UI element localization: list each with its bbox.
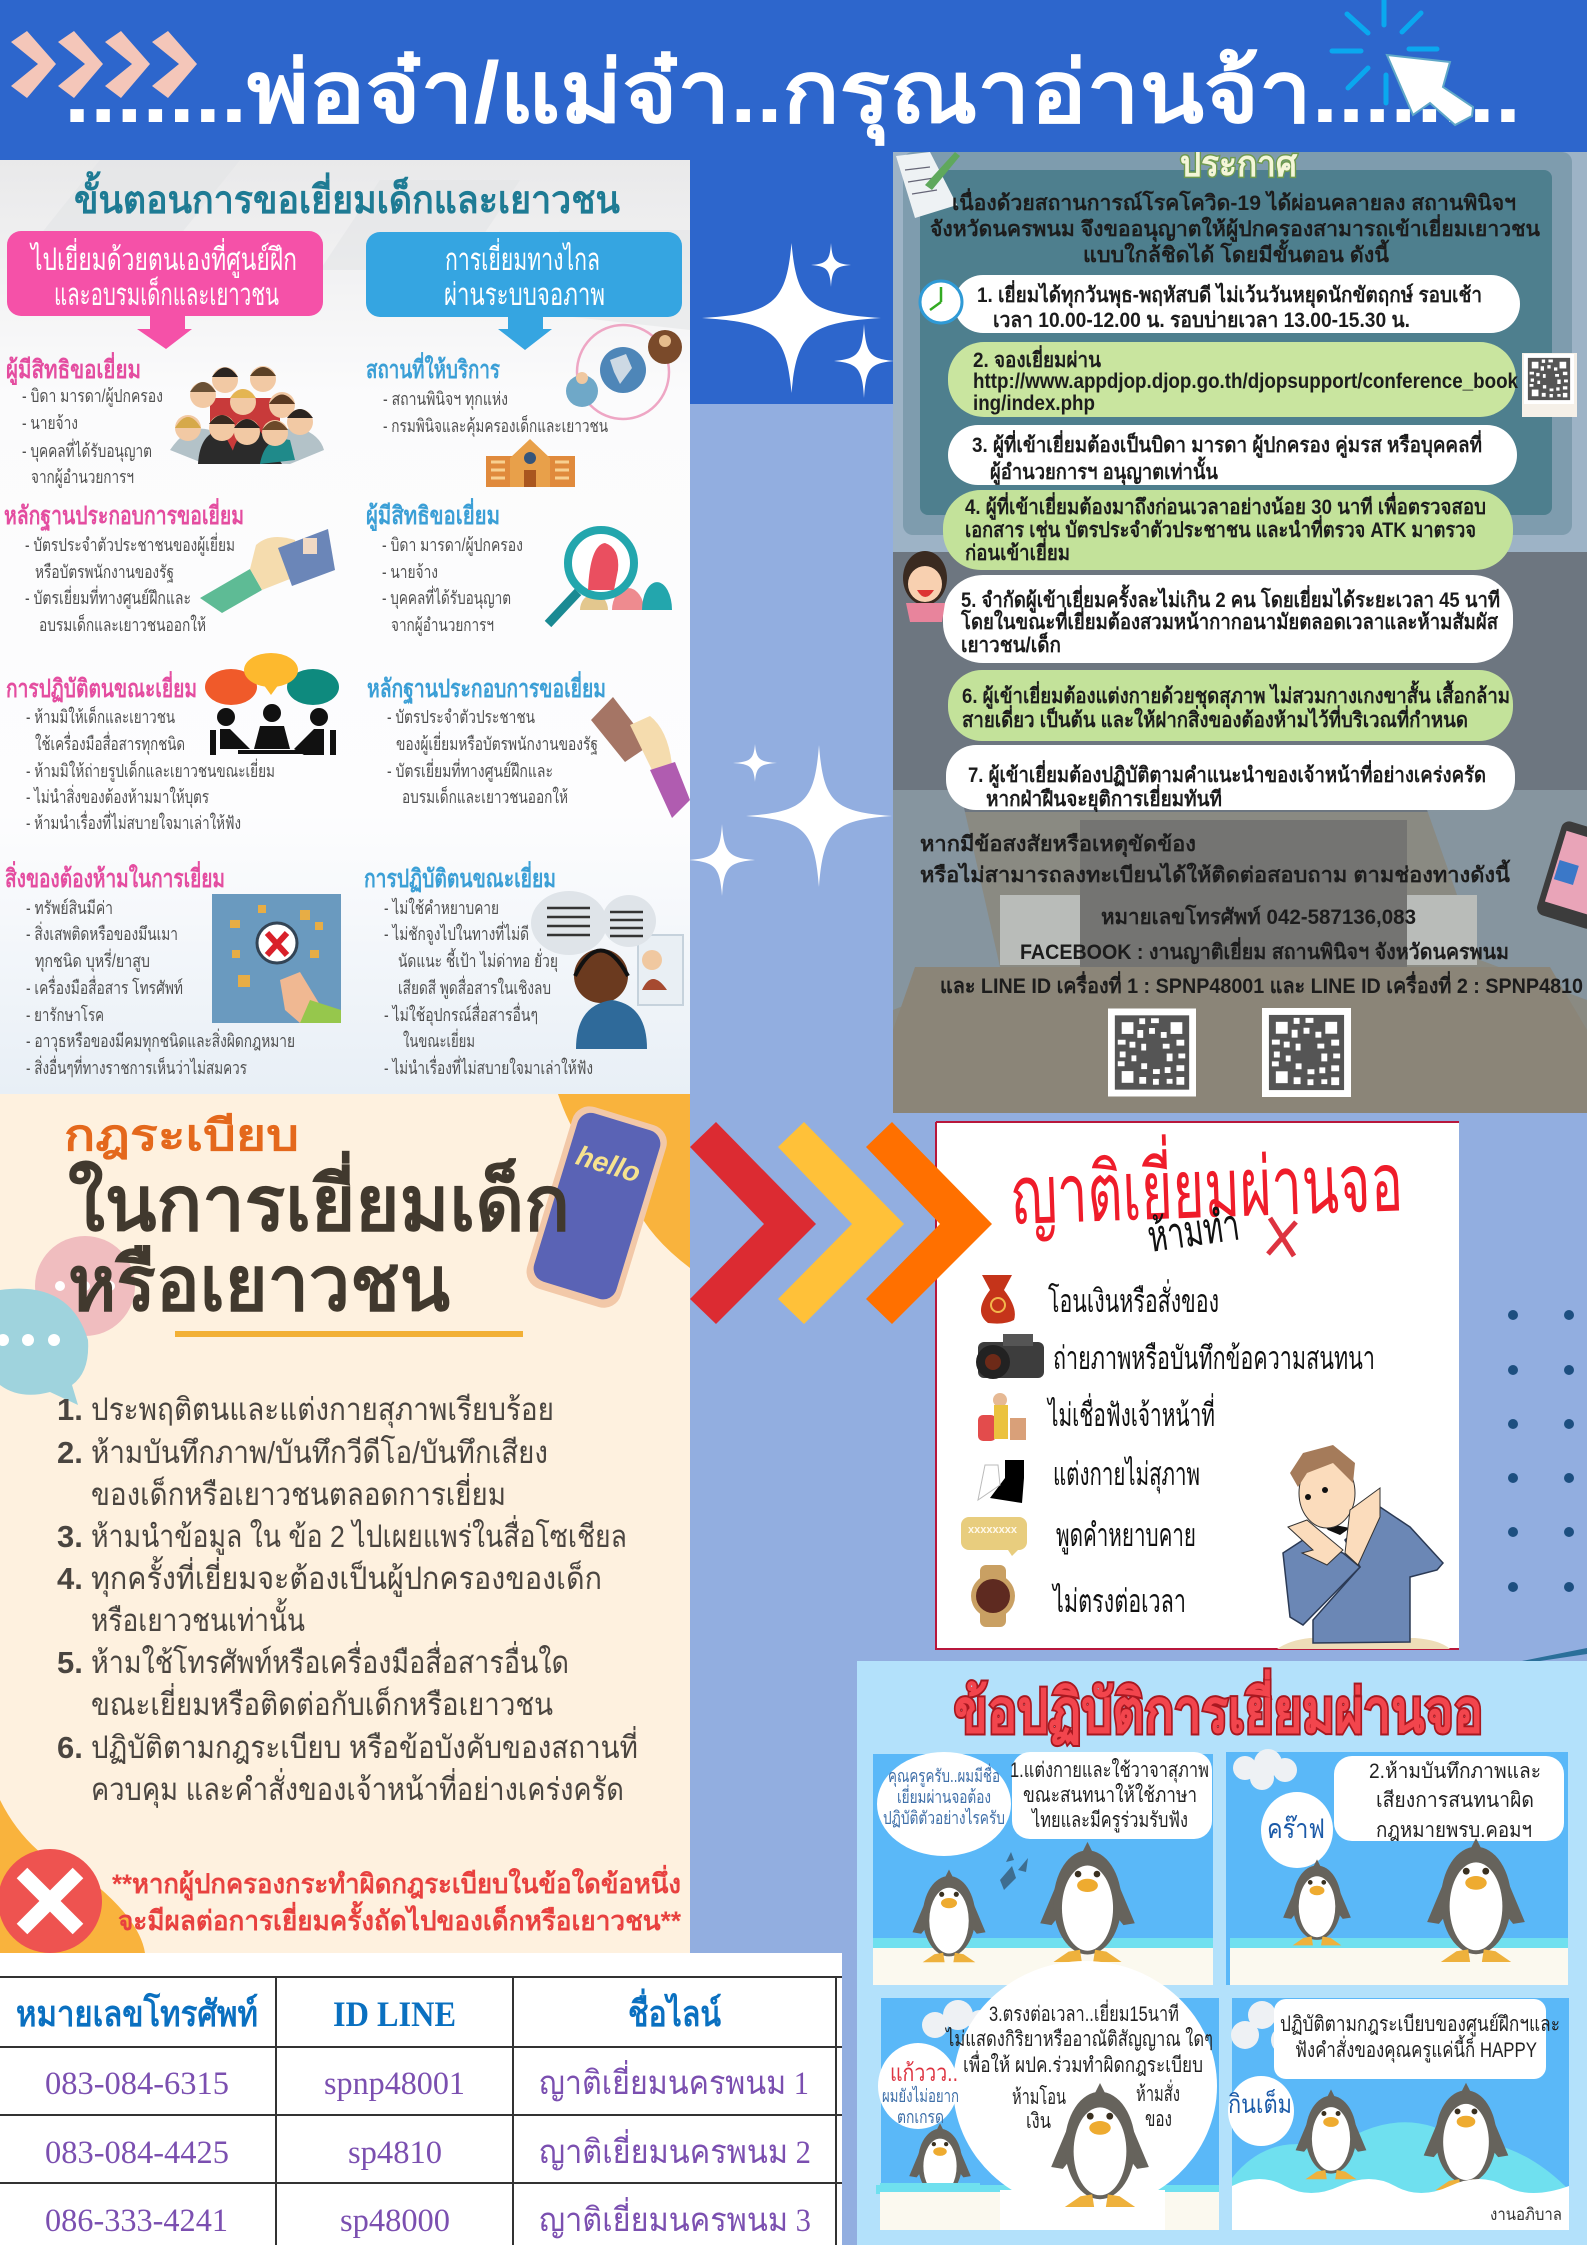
comic frame 3: [876, 1961, 1219, 2230]
block: documents in person: [4, 498, 244, 635]
step 6: [948, 670, 1513, 741]
block: conduct in person: ใช้เครื่องมือสื่อสารทุกชนิด: [35, 731, 185, 755]
block: eligible in person: [6, 352, 163, 488]
box: in person: ไปเยี่ยมด้วยตนเองที่ศูนย์ฝึก: [29, 238, 297, 278]
box: remote: การเยี่ยมทางไกล: [445, 238, 600, 277]
block: documents remote: ของผู้เยี่ยมหรือบัตรพนักงานของรัฐ: [396, 731, 598, 755]
speech bubble: pink: [35, 1236, 135, 1336]
table header: ชื่อไลน์: [628, 1988, 721, 2034]
title: .......พ่อจ๋า/แม่จ๋า..กรุณาอ่านจ้า........: [64, 45, 1521, 146]
row 3: [45, 2197, 811, 2239]
icon: meeting with speech bubbles: [205, 653, 339, 755]
block: conduct in person: - ห้ามนำเรื่องที่ไม่สบายใจมาเล่าให้ฟัง: [26, 810, 241, 833]
warning text: **หากผู้ปกครองกระทำผิดกฎระเบียบในข้อใดข้อหนึ่ง: [112, 1864, 681, 1901]
text: not on time: ไม่ตรงต่อเวลา: [1051, 1583, 1186, 1619]
panel: comic: [857, 1661, 1587, 2245]
icon: speech bubble rude: [961, 1517, 1027, 1556]
step 5: โดยในขณะที่เยี่ยมต้องสวมหน้ากากอนามัยตลอดเวลาและห้ามสัมผัส: [960, 606, 1498, 634]
row 1: [45, 2060, 809, 2102]
step 7: 7. ผู้เข้าเยี่ยมต้องปฏิบัติตามคำแนะนำของเจ้าหน้าที่อย่างเคร่งครัด: [968, 759, 1486, 789]
block: eligible in person: - บิดา มารดา/ผู้ปกครอง: [22, 386, 163, 407]
list: rules: ปฏิบัติตามกฎระเบียบ หรือข้อบังคับของสถานที่: [91, 1726, 638, 1765]
block: prohibited items: - อาวุธหรือของมีคมทุกชนิดและสิ่งผิดกฎหมาย: [26, 1028, 295, 1052]
block: prohibited items: ทุกชนิด บุหรี่/ยาสูบ: [35, 948, 150, 972]
icon: red x: [0, 1849, 102, 1953]
list: rules: 6.: [57, 1730, 83, 1765]
comic frame 2: 2.ห้ามบันทึกภาพและ: [1369, 1760, 1541, 1783]
icon: wrist watch: [971, 1565, 1015, 1627]
step 1: 1. เยี่ยมได้ทุกวันพุธ-พฤหัสบดี ไม่เว้นวันหยุดนักขัตฤกษ์ รอบเช้า: [977, 279, 1482, 309]
step 6: 6. ผู้เข้าเยี่ยมต้องแต่งกายด้วยชุดสุภาพ ไม่สวมกางเกงขาสั้น เสื้อกล้าม: [962, 680, 1510, 710]
block: conduct remote: ในขณะเยี่ยม: [403, 1028, 475, 1051]
sparkles: [689, 243, 894, 896]
step 4: เอกสาร เช่น บัตรประจำตัวประชาชน และนำที่ตรวจ ATK มาตรวจ: [965, 514, 1476, 542]
block: service places: - สถานพินิจฯ ทุกแห่ง: [383, 389, 508, 410]
box: remote: [366, 232, 682, 350]
list: rules: ห้ามบันทึกภาพ/บันทึกวีดีโอ/บันทึกเสียง: [91, 1435, 548, 1470]
icon: cursor with rays: [1332, 0, 1473, 125]
comic frame 1: ไทยและมีครูร่วมรับฟัง: [1030, 1808, 1188, 1833]
block: conduct in person: - ไม่นำสิ่งของต้องห้ามมาให้บุตร: [26, 784, 209, 808]
step 4: [943, 490, 1513, 570]
block: eligible remote: [366, 498, 523, 636]
header band: [0, 0, 1587, 160]
block: eligible remote: - นายจ้าง: [382, 562, 438, 582]
icon: woman: [903, 551, 947, 622]
block: prohibited items: - สิ่งเสพติดหรือของมึนเมา: [26, 921, 178, 944]
heading: do not: ห้ามทำ: [1145, 1201, 1242, 1262]
row 3: sp48000: [340, 2203, 450, 2239]
block: documents in person: หลักฐานประกอบการขอเยี่ยม: [4, 498, 244, 532]
text: improper dress: แต่งกายไม่สุภาพ: [1053, 1456, 1200, 1494]
icon: phone hello: hello: [573, 1140, 644, 1188]
step 3: [948, 425, 1517, 486]
comic frame 1: เยี่ยมผ่านจอต้อง: [897, 1784, 991, 1807]
icon: clock: [920, 281, 962, 323]
step 2: 2. จองเยี่ยมผ่าน: [973, 344, 1102, 372]
icon: money bag: [981, 1275, 1015, 1324]
list: rules: ห้ามนำข้อมูล ใน ข้อ 2 ไปเผยแพร่ในสื่อโซเชียล: [91, 1515, 627, 1555]
step 2: http://www.appdjop.djop.go.th/djopsupport/conference_book: [973, 370, 1518, 393]
underline: [175, 1331, 523, 1337]
step 4: 4. ผู้ที่เข้าเยี่ยมต้องมาถึงก่อนเวลาอย่างน้อย 30 นาที เพื่อตรวจสอบ: [965, 491, 1486, 521]
block: eligible in person: - บุคคลที่ได้รับอนุญาต: [22, 438, 152, 462]
icon: inspection with red x: [212, 894, 341, 1023]
block: prohibited items: สิ่งของต้องห้ามในการเยี่ยม: [5, 861, 225, 893]
block: conduct remote: - ไม่ใช้คำหยาบคาย: [384, 897, 499, 918]
block: prohibited items: - สิ่งอื่นๆที่ทางราชการเห็นว่าไม่สมควร: [26, 1055, 247, 1078]
step 5: 5. จำกัดผู้เข้าเยี่ยมครั้งละไม่เกิน 2 คน โดยเยี่ยมได้ระยะเวลา 45 นาที: [961, 584, 1500, 614]
row 2: sp4810: [348, 2135, 442, 2171]
row 3: 086-333-4241: [45, 2203, 228, 2239]
block: documents in person: อบรมเด็กและเยาวชนออกให้: [39, 613, 206, 635]
list: rules: ประพฤติตนและแต่งกายสุภาพเรียบร้อย: [91, 1392, 554, 1429]
list: rules: ทุกครั้งที่เยี่ยมจะต้องเป็นผู้ปกครองของเด็ก: [91, 1556, 602, 1598]
speech bubble: teal: [0, 1289, 88, 1405]
table header: [16, 1988, 721, 2034]
step 7: [946, 745, 1515, 813]
text: introduction: จังหวัดนครพนม จึงขออนุญาตให้ผู้ปกครองสามารถเข้าเยี่ยมเยาวชน: [930, 213, 1541, 243]
block: documents in person: - บัตรเยี่ยมที่ทางศูนย์ฝึกและ: [25, 585, 191, 609]
comic frame 1: ปฏิบัติตัวอย่างไรครับ: [883, 1807, 1005, 1828]
block: documents remote: อบรมเด็กและเยาวชนออกให้: [402, 785, 568, 807]
comic frame 3: ไม่แสดงกิริยาหรืออาณัติสัญญาณ ใดๆ: [944, 2027, 1213, 2051]
panel: rules: [0, 1094, 690, 1953]
icon: note and pencil: [896, 152, 960, 218]
block: service places: สถานที่ให้บริการ: [366, 352, 500, 384]
block: service places: [366, 352, 608, 437]
step 1: เวลา 10.00-12.00 น. รอบบ่ายเวลา 13.00-15.30 น.: [993, 309, 1410, 332]
comic frame 1: ขณะสนทนาให้ใช้ภาษา: [1023, 1783, 1197, 1807]
box: in person: [7, 231, 323, 349]
row 1: spnp48001: [324, 2066, 465, 2102]
block: conduct in person: - ห้ามมิให้ถ่ายรูปเด็กและเยาวชนขณะเยี่ยม: [26, 758, 275, 782]
icon: group of people: [170, 366, 324, 464]
comic frame 1: [873, 1752, 1213, 1985]
comic frame 3: แก้ววว..: [890, 2060, 958, 2087]
list: rules: ขณะเยี่ยมหรือติดต่อกับเด็กหรือเยาวชน: [91, 1683, 553, 1722]
comic frame 2: [1226, 1749, 1568, 1985]
blob: top right: [558, 1094, 690, 1268]
comic frame 3: เพื่อให้ ผปค.ร่วมทำผิดกฎระเบียบ: [963, 2050, 1203, 2077]
block: eligible remote: ผู้มีสิทธิขอเยี่ยม: [366, 498, 500, 532]
list: rules: 2.: [57, 1435, 83, 1470]
heading: rules: กฎระเบียบ: [64, 1112, 299, 1160]
comic frame 4: [1228, 1998, 1569, 2230]
icon: phone hello: [522, 1102, 671, 1312]
warning text: [112, 1864, 681, 1936]
block: conduct in person: การปฏิบัติตนขณะเยี่ยม: [6, 671, 197, 703]
block: service places: - กรมพินิจและคุ้มครองเด็กและเยาวชน: [383, 414, 608, 437]
decorative dots: [1508, 1310, 1574, 1592]
warning text: จะมีผลต่อการเยี่ยมครั้งถัดไปของเด็กหรือเยาวชน**: [118, 1900, 681, 1936]
comic frame 2: คร๊าฟ: [1267, 1814, 1325, 1844]
list: rules: ของเด็กหรือเยาวชนตลอดการเยี่ยม: [91, 1473, 506, 1512]
panel: visit procedure: [0, 160, 690, 1094]
icon: disobedient people: [978, 1393, 1026, 1441]
comic frame 4: กินเต็ม: [1228, 2088, 1292, 2119]
text: disobey officers: ไม่เชื่อฟังเจ้าหน้าที่: [1046, 1393, 1215, 1433]
comic frame 3: เงิน: [1026, 2110, 1051, 2133]
comic frame 2: เสียงการสนทนาผิด: [1376, 1789, 1534, 1812]
text: contact: หรือไม่สามารถลงทะเบียนได้ให้ติดต่อสอบถาม ตามช่องทางดังนี้: [920, 859, 1511, 887]
block: conduct remote: - ไม่ใช้อุปกรณ์สื่อสารอื่นๆ: [384, 1002, 538, 1026]
block: conduct remote: เสียดสี พูดสื่อสารในเชิงลบ: [398, 975, 551, 999]
step 2: [948, 342, 1518, 417]
text: transfer money: โอนเงินหรือสั่งของ: [1048, 1279, 1219, 1319]
list: rules: [57, 1392, 638, 1809]
icon: magnifier with people: [548, 530, 672, 624]
block: eligible remote: - บิดา มารดา/ผู้ปกครอง: [382, 535, 523, 556]
table header: ID LINE: [333, 1994, 456, 2034]
row 2: ญาติเยี่ยมนครพนม 2: [539, 2129, 811, 2171]
icon: globe with users: [566, 325, 682, 419]
text: photo or record: ถ่ายภาพหรือบันทึกข้อความสนทนา: [1053, 1340, 1375, 1376]
step 2: ing/index.php: [973, 392, 1095, 415]
block: prohibited items: - ยารักษาโรค: [26, 1004, 104, 1025]
text: introduction: เนื่องด้วยสถานการณ์โรคโควิด-19 ได้ผ่อนคลายลง สถานพินิจฯ: [952, 187, 1516, 215]
row 3: ญาติเยี่ยมนครพนม 3: [539, 2197, 811, 2239]
block: documents remote: หลักฐานประกอบการขอเยี่ยม: [367, 671, 606, 705]
row 2: [45, 2129, 811, 2171]
block: conduct remote: นัดแนะ ชี้เป้า ไม่ด่าทอ ยั่วยุ: [398, 948, 558, 972]
list: rules: 1.: [57, 1392, 83, 1427]
row 2: 083-084-4425: [45, 2135, 229, 2171]
list: rules: 4.: [57, 1561, 83, 1596]
block: eligible in person: จากผู้อำนวยการฯ: [31, 467, 134, 488]
step 3: 3. ผู้ที่เข้าเยี่ยมต้องเป็นบิดา มารดา ผู้ปกครอง คู่มรส หรือบุคคลที่: [972, 429, 1482, 459]
comic frame 1: คุณครูครับ..ผมมีชื่อ: [888, 1763, 1000, 1787]
comic frame 3: 3.ตรงต่อเวลา..เยี่ยม15นาที: [989, 1999, 1179, 2026]
step 4: ก่อนเข้าเยี่ยม: [965, 537, 1070, 565]
block: documents in person: - บัตรประจำตัวประชาชนของผู้เยี่ยม: [25, 532, 235, 556]
block: prohibited items: - เครื่องมือสื่อสาร โทรศัพท์: [26, 975, 183, 998]
block: eligible in person: - นายจ้าง: [22, 413, 78, 433]
comic frame 4: งานอภิบาล: [1490, 2205, 1562, 2224]
table: contacts: [0, 1953, 842, 2245]
row 1: ญาติเยี่ยมนครพนม 1: [539, 2060, 809, 2102]
box: in person: และอบรมเด็กและเยาวชน: [54, 276, 279, 312]
list: rules: ห้ามใช้โทรศัพท์หรือเครื่องมือสื่อสารอื่นใด: [91, 1641, 569, 1680]
icon: building: [486, 439, 575, 487]
block: conduct in person: - ห้ามมิให้เด็กและเยาวชน: [26, 705, 175, 727]
list: rules: หรือเยาวชนเท่านั้น: [91, 1598, 305, 1638]
icon: speech bubble rude: xxxxxxxx: [968, 1524, 1018, 1536]
step 1: [954, 275, 1520, 333]
block: eligible remote: - บุคคลที่ได้รับอนุญาต: [382, 585, 511, 609]
block: conduct remote: - ไม่ชักจูงไปในทางที่ไม่ดี: [384, 921, 529, 945]
icon: phone: [1535, 819, 1587, 931]
text: contact: หมายเลขโทรศัพท์ 042-587136,083: [1101, 904, 1416, 929]
block: prohibited items: [5, 861, 295, 1078]
block: conduct remote: [364, 861, 593, 1078]
block: conduct remote: - ไม่นำเรื่องที่ไม่สบายใจมาเล่าให้ฟัง: [384, 1055, 593, 1078]
block: conduct remote: การปฏิบัติตนขณะเยี่ยม: [364, 861, 556, 893]
qr code: line 2: [1262, 1008, 1351, 1097]
icon: hand with brown card: [591, 697, 690, 818]
comic heading: ข้อปฏิบัติการเยี่ยมผ่านจอ: [954, 1669, 1483, 1745]
heading: ประกาศ: ประกาศ: [1180, 143, 1298, 184]
icon: middle chevrons: [690, 1122, 992, 1324]
block: documents remote: [367, 671, 606, 807]
block: documents remote: - บัตรประจำตัวประชาชน: [387, 707, 535, 727]
blue strip between panels: [690, 0, 893, 404]
qr code: line 1: [1108, 1008, 1196, 1096]
icon: hand with card: [200, 529, 335, 613]
icon: x mark: [1268, 1218, 1296, 1256]
blob: bottom left: [0, 1800, 145, 1953]
block: documents remote: - บัตรเยี่ยมที่ทางศูนย์ฝึกและ: [387, 758, 553, 782]
icon: dress: [978, 1460, 1024, 1503]
step 3: ผู้อำนวยการฯ อนุญาตเท่านั้น: [990, 456, 1219, 486]
text: contact: หากมีข้อสงสัยหรือเหตุขัดข้อง: [920, 832, 1196, 858]
heading: or youth: หรือเยาวชน: [68, 1242, 450, 1327]
text: introduction: แบบใกล้ชิดได้ โดยมีขั้นตอน ดังนี้: [1083, 239, 1390, 267]
comic frame 3: ตกเกรด: [897, 2107, 944, 2127]
illustration: man with crossed arms: [1277, 1445, 1450, 1649]
step 5: [943, 575, 1513, 663]
list: rules: ควบคุม และคำสั่งของเจ้าหน้าที่อย่างเคร่งครัด: [91, 1768, 624, 1809]
table header: หมายเลขโทรศัพท์: [16, 1992, 258, 2034]
text: contact: FACEBOOK : งานญาติเยี่ยม สถานพินิจฯ จังหวัดนครพนม: [1020, 936, 1509, 965]
text: contact: [920, 832, 1583, 998]
heading: in child visits: ในการเยี่ยมเด็ก: [68, 1150, 570, 1247]
comic frame 2: กฎหมายพรบ.คอมฯ: [1376, 1819, 1532, 1842]
block: eligible remote: จากผู้อำนวยการฯ: [391, 615, 494, 636]
icon: header chevrons: [11, 31, 197, 98]
icon: camera: [976, 1334, 1044, 1379]
box: remote: ผ่านระบบจอภาพ: [444, 277, 605, 312]
comic frame 3: ผมยังไม่อยาก: [882, 2085, 959, 2106]
list: rules: 5.: [57, 1645, 83, 1680]
qr code: booking: [1522, 353, 1577, 417]
row 1: 083-084-6315: [45, 2066, 229, 2102]
step 6: สายเดี่ยว เป็นต้น และให้ฝากสิ่งของต้องห้ามไว้ที่บริเวณที่กำหนด: [962, 704, 1468, 732]
block: eligible in person: ผู้มีสิทธิขอเยี่ยม: [6, 352, 141, 386]
text: rude speech: พูดคำหยาบคาย: [1056, 1517, 1196, 1555]
heading: visit steps: ขั้นตอนการขอเยี่ยมเด็กและเยาวชน: [74, 171, 620, 222]
block: conduct in person: [6, 671, 275, 833]
comic frame 3: ห้ามโอน: [1012, 2085, 1066, 2109]
step 5: เยาวชน/เด็ก: [961, 631, 1061, 657]
panel: announcement: [893, 143, 1587, 1113]
list: rules: 3.: [57, 1519, 83, 1554]
icon: online call person: [531, 891, 683, 1049]
comic frame 3: ของ: [1145, 2108, 1172, 2131]
comic frame 3: ห้ามสั่ง: [1136, 2079, 1180, 2106]
block: documents in person: หรือบัตรพนักงานของรัฐ: [35, 562, 174, 583]
text: introduction: [930, 187, 1541, 267]
accent stroke: [1522, 1648, 1587, 1661]
panel: screen visit prohibitions: [936, 1122, 1459, 1649]
comic frame 1: 1.แต่งกายและใช้วาจาสุภาพ: [1010, 1758, 1209, 1783]
step 7: หากฝ่าฝืนจะยุติการเยี่ยมทันที: [986, 783, 1222, 813]
block: prohibited items: - ทรัพย์สินมีค่า: [26, 898, 113, 918]
